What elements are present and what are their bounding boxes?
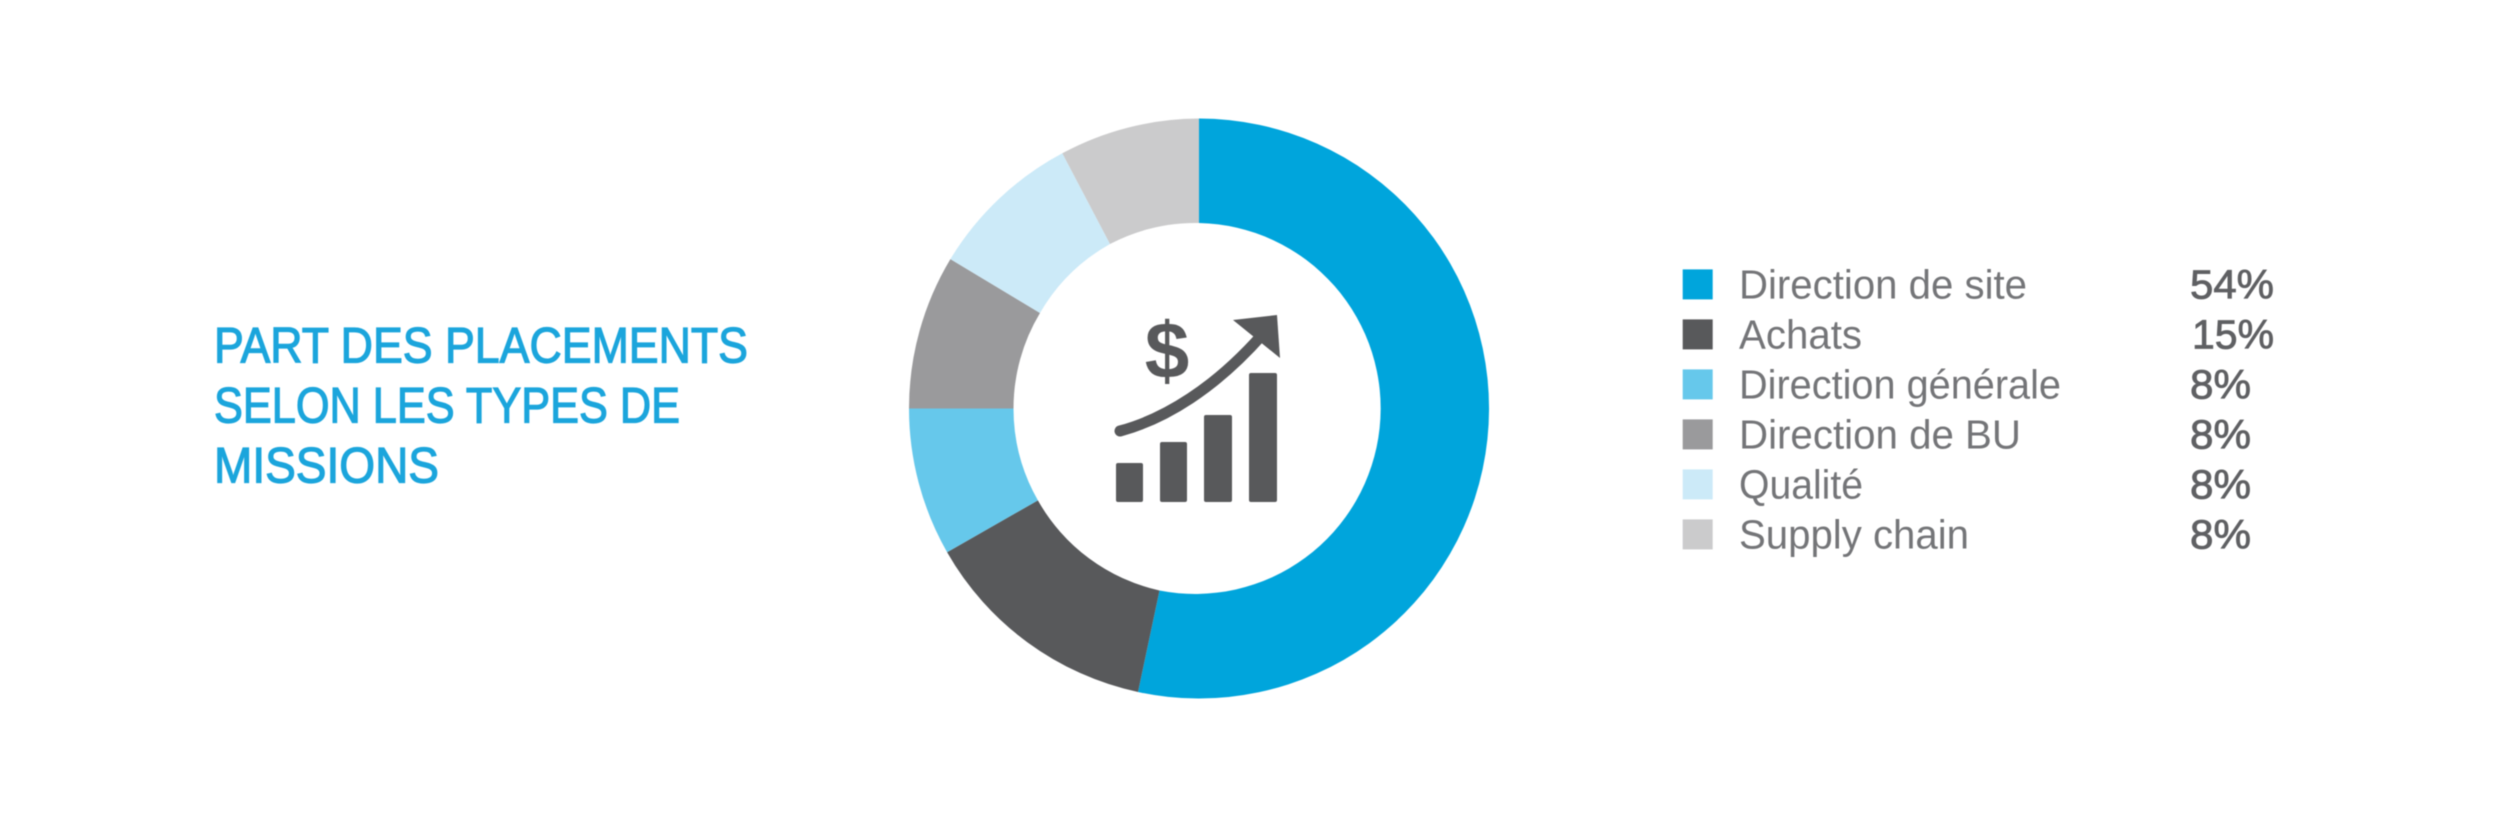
segment: Direction de site 54%	[1138, 118, 1489, 698]
legend row: Direction générale: Direction générale	[1739, 362, 2061, 408]
legend row: Direction de site: Direction de site	[1739, 262, 2027, 308]
icon: rising chart with dollar	[1116, 306, 1280, 502]
legend row: Direction de BU: Direction de BU	[1739, 412, 2021, 458]
legend row: Achats	[1683, 312, 2274, 358]
legend row: Direction générale	[1683, 362, 2251, 408]
legend row: Supply chain: Supply chain	[1739, 512, 1969, 558]
legend	[1683, 262, 2274, 558]
legend row: Supply chain	[1683, 512, 2251, 558]
icon: dollar sign: $	[1145, 306, 1189, 395]
legend row: Direction de BU	[1683, 412, 2251, 458]
title	[214, 318, 748, 494]
segment: Direction de BU 8%	[909, 259, 1040, 408]
segment: Supply chain 8%	[1062, 118, 1199, 244]
legend row: Direction de site	[1683, 262, 2274, 308]
segment: Qualité 8%	[950, 153, 1110, 313]
legend row: Qualité: Qualité	[1739, 462, 1863, 508]
legend row: Supply chain: 8%	[2190, 512, 2251, 558]
icon: growth arrow	[1120, 315, 1280, 431]
legend row: Direction générale: 8%	[2190, 362, 2251, 408]
title: SELON LES TYPES DE	[214, 378, 680, 434]
segment: Direction générale 8%	[909, 408, 1038, 552]
legend row: Qualité: 8%	[2190, 462, 2251, 508]
legend row: Direction de site: 54%	[2190, 262, 2274, 308]
donut chart	[909, 118, 1489, 698]
legend row: Direction de BU: 8%	[2190, 412, 2251, 458]
segment: Achats 15%	[947, 500, 1160, 692]
title: PART DES PLACEMENTS	[214, 318, 748, 374]
legend row: Achats: 15%	[2192, 312, 2274, 358]
legend row: Qualité	[1683, 462, 2251, 508]
icon: bars	[1116, 373, 1277, 502]
title: MISSIONS	[214, 438, 439, 494]
legend row: Achats: Achats	[1739, 312, 1862, 358]
